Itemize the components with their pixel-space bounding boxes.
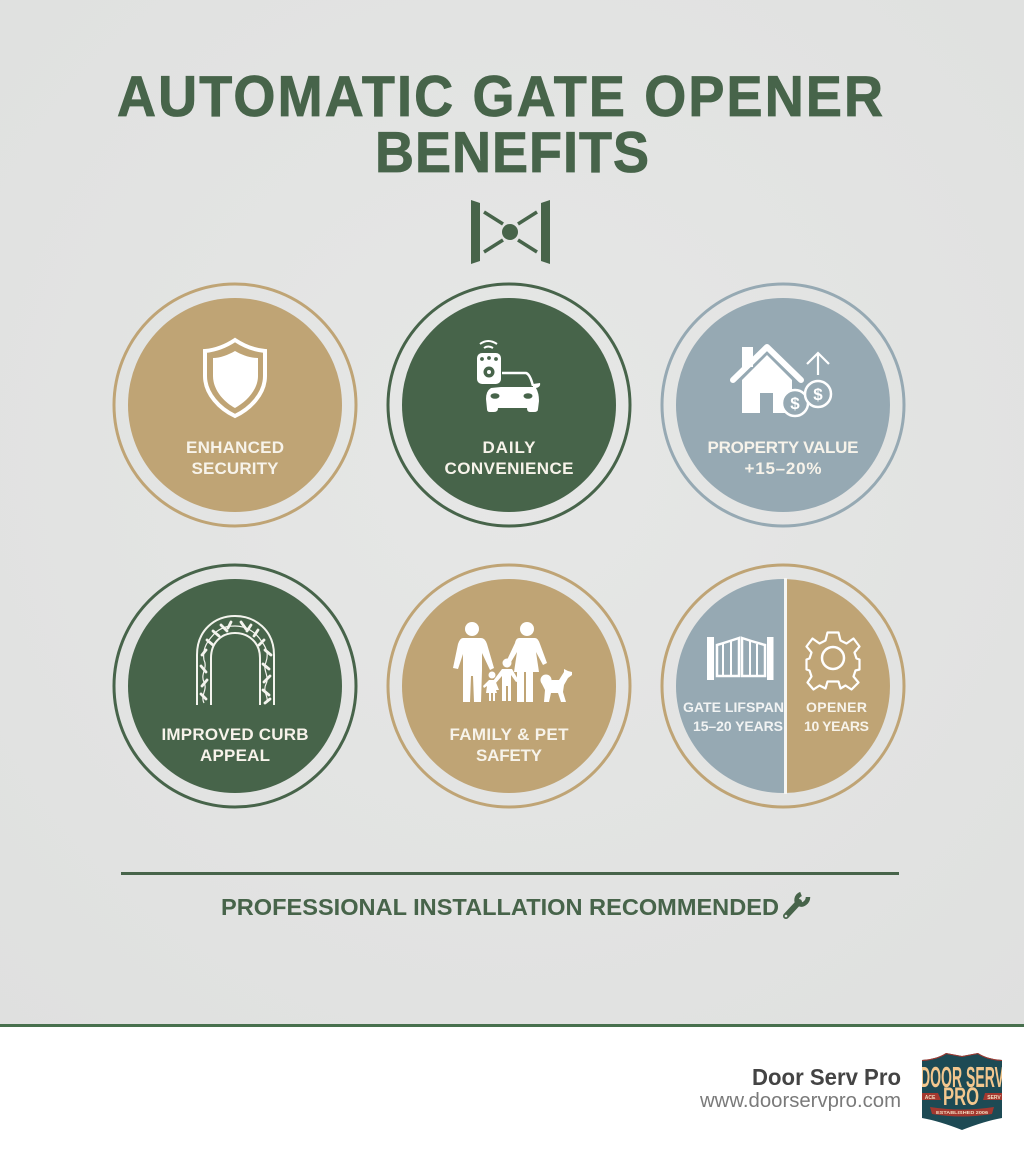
label: opener lifespan: 10 YEARS xyxy=(804,718,869,734)
website: www.doorservpro.com xyxy=(699,1090,901,1112)
icon: house and coins xyxy=(733,347,831,416)
label: gate lifespan: GATE LIFSPAN xyxy=(683,699,784,715)
brand name: Door Serv Pro xyxy=(752,1064,901,1090)
logo: PRO xyxy=(943,1083,979,1111)
label: improved curb appeal: IMPROVED CURB xyxy=(162,725,308,744)
panel: lifespan split circle xyxy=(662,565,904,807)
icon: shield xyxy=(205,340,265,416)
label: improved curb appeal: APPEAL xyxy=(200,746,270,765)
label: gate lifespan xyxy=(683,699,784,734)
label: opener lifespan xyxy=(804,699,869,734)
panel: family and pet safety xyxy=(388,565,630,807)
label: improved curb appeal xyxy=(162,725,308,765)
panel: improved curb appeal xyxy=(114,565,356,807)
icon: garden arch xyxy=(197,616,274,705)
footer xyxy=(0,1024,1024,1154)
label: property value: +15–20% xyxy=(744,459,822,478)
icon: wrench xyxy=(785,894,808,917)
icon: gate xyxy=(707,637,774,680)
logo: ESTABLISHED 2006 xyxy=(936,1110,989,1115)
panel: property value xyxy=(662,284,904,526)
label: daily convenience: CONVENIENCE xyxy=(444,459,574,478)
icon: remote and car xyxy=(477,341,540,412)
icon: house and coins: $ xyxy=(790,394,800,413)
logo xyxy=(920,1053,1004,1130)
label: enhanced security: SECURITY xyxy=(192,459,279,478)
label: daily convenience: DAILY xyxy=(482,438,536,457)
icon: gate emblem xyxy=(471,200,550,264)
label: enhanced security: ENHANCED xyxy=(186,438,284,457)
icon: gear xyxy=(806,632,860,690)
panel: daily convenience xyxy=(388,284,630,526)
label: family and pet safety: SAFETY xyxy=(476,746,543,765)
logo: ACE xyxy=(925,1095,936,1101)
icon: family and dog xyxy=(453,622,572,702)
label: family and pet safety xyxy=(450,725,569,765)
callout: professional installation: PROFESSIONAL INSTALLATION RECOMMENDED xyxy=(221,894,779,920)
label: opener lifespan: OPENER xyxy=(806,699,867,715)
logo: SERV xyxy=(987,1095,1001,1101)
title: AUTOMATIC GATE OPENER xyxy=(117,63,883,128)
label: family and pet safety: FAMILY & PET xyxy=(450,725,569,744)
label: enhanced security xyxy=(186,438,284,478)
label: daily convenience xyxy=(444,438,574,478)
icon: house and coins: $ xyxy=(813,385,823,404)
title xyxy=(117,63,883,184)
label: gate lifespan: 15–20 YEARS xyxy=(693,718,783,734)
panel: enhanced security xyxy=(114,284,356,526)
label: property value xyxy=(708,438,858,478)
title: BENEFITS xyxy=(375,119,649,184)
label: property value: PROPERTY VALUE xyxy=(708,438,858,457)
